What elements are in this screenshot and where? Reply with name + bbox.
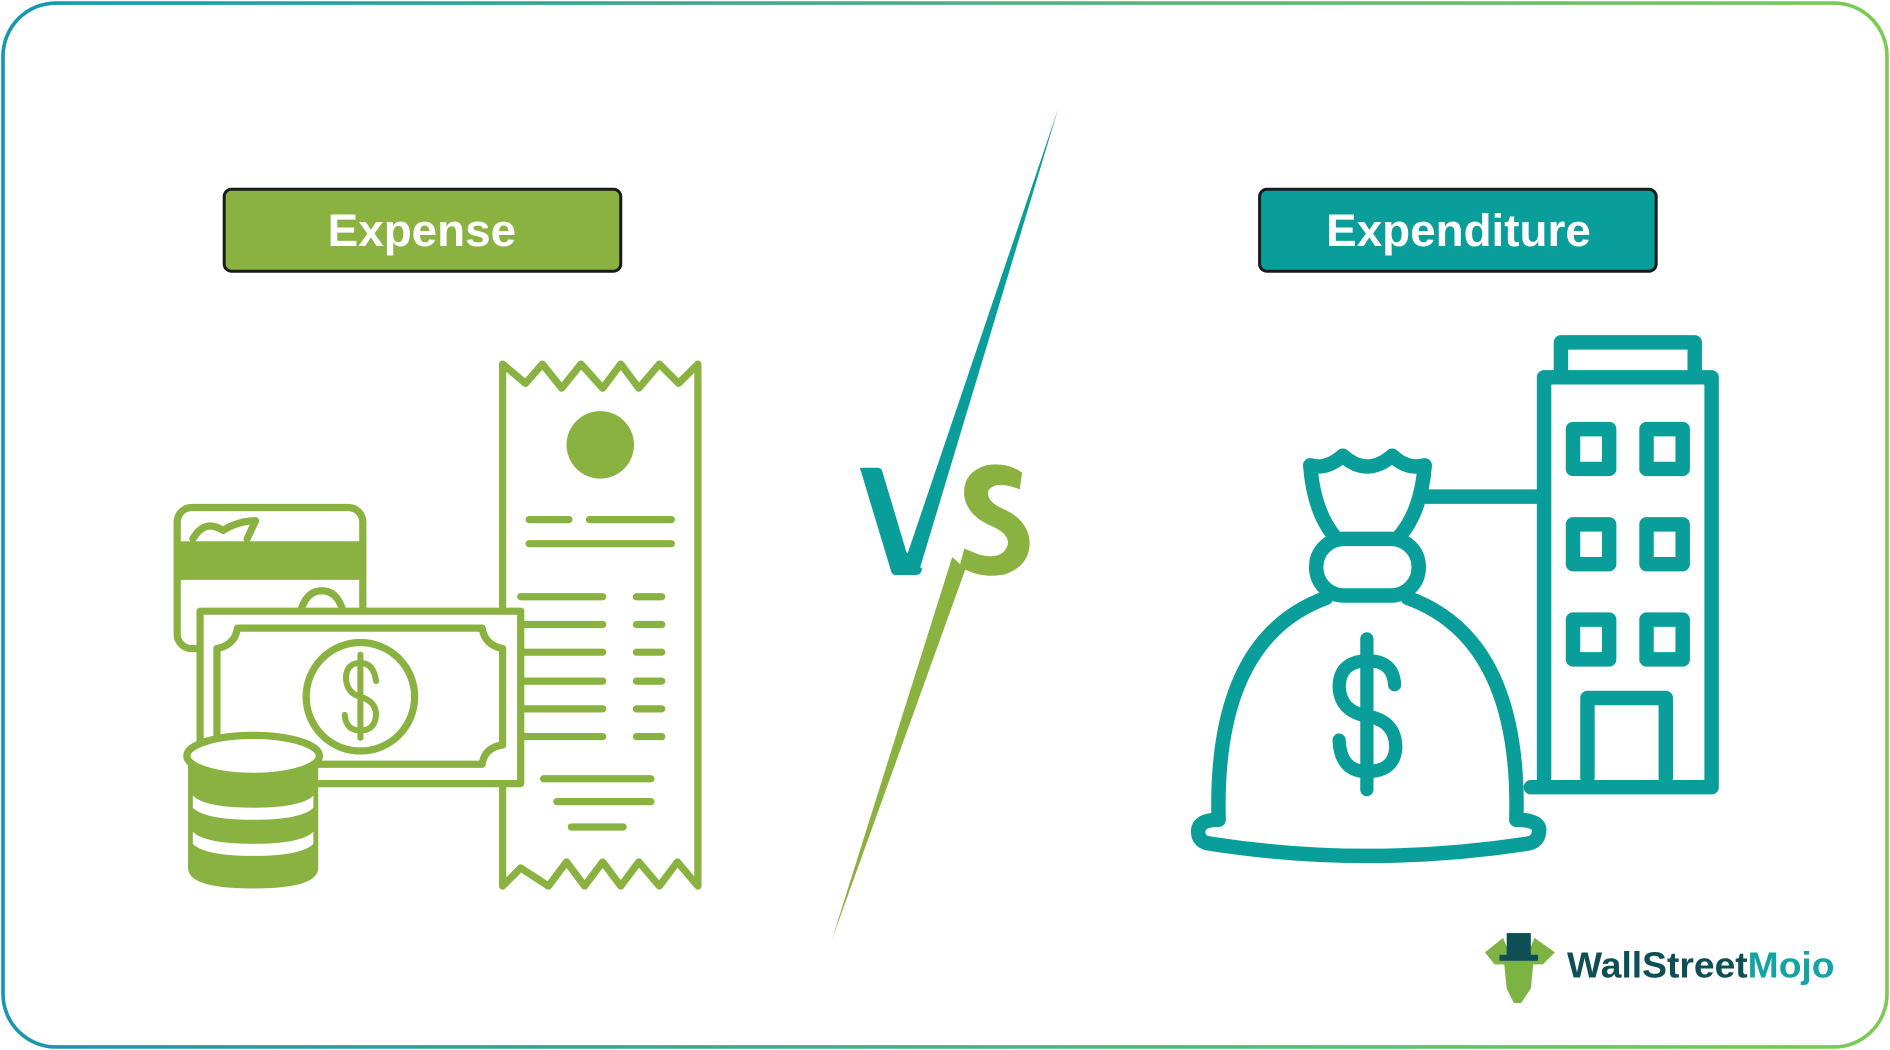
building bbox=[1531, 342, 1712, 787]
cash bbox=[200, 611, 521, 784]
icon: expenditure (money bag and building) bbox=[1198, 342, 1712, 856]
VS text bbox=[860, 464, 1030, 576]
heading: Expense bbox=[224, 189, 621, 271]
heading: Expenditure bbox=[1260, 189, 1656, 271]
card bbox=[177, 508, 363, 649]
coins bbox=[188, 759, 318, 888]
heading: Expense: Expense bbox=[328, 205, 516, 256]
receipt bbox=[503, 364, 698, 886]
logo: WallStreetMojo: WallStreetMojo bbox=[1567, 945, 1835, 986]
heading: Expenditure: Expenditure bbox=[1326, 205, 1591, 256]
icon: expense (card, cash, coins, receipt) bbox=[177, 364, 698, 888]
divider line bbox=[832, 108, 1058, 940]
logo: WallStreetMojo bbox=[1485, 933, 1835, 1003]
bag bbox=[1310, 456, 1425, 538]
